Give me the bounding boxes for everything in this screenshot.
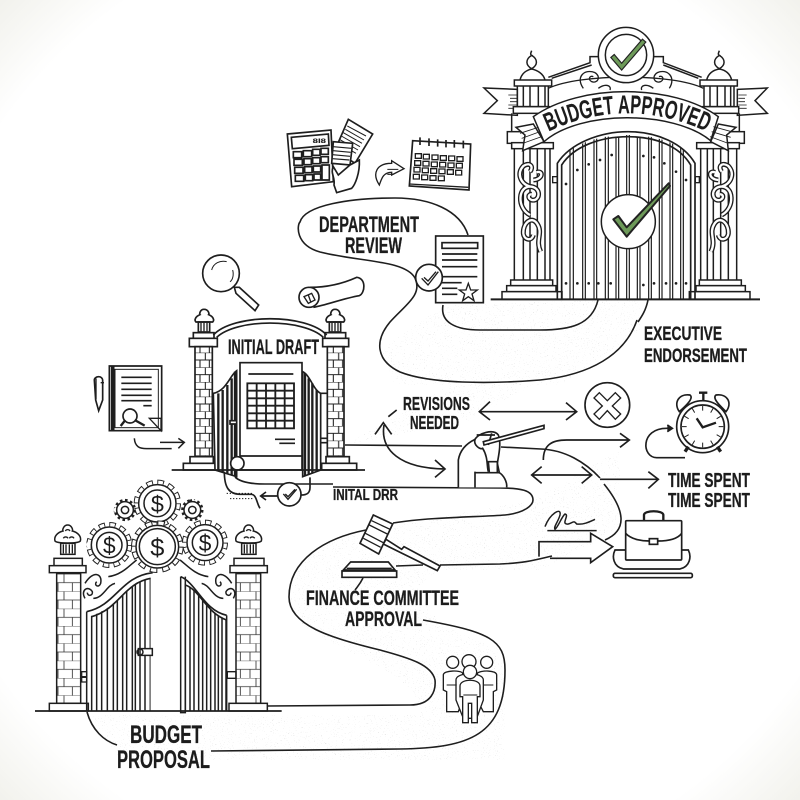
label: time spent: TIME SPENT [668,470,750,492]
door check badge [601,183,670,249]
right column [689,51,750,299]
icon: certified document [416,236,483,303]
gear cluster with dollar signs [91,484,224,569]
arrows around figure [375,402,658,488]
left pillar [49,525,88,711]
right pillar [322,309,357,470]
arrow: clock loop [646,425,685,458]
icon: rolled scroll [299,277,364,307]
gear left: $ [103,532,116,558]
label: time spent [668,470,750,512]
label: initial draft repeated: INITAL DRR [333,487,398,504]
small gear right [184,502,201,518]
gate: budget approved [482,26,770,300]
label: budget proposal: BUDGET [130,721,202,749]
arrow: draft to gate [134,438,184,449]
arched door [553,130,699,299]
label: budget proposal: PROPOSAL [117,746,210,774]
icon: calculator: 8I8 [313,138,326,145]
ornamental scrolls [83,560,235,598]
icon: committee people [443,655,497,723]
arch [213,319,327,337]
left leaf [82,570,153,711]
label: department review: REVIEW [345,233,402,258]
label: revisions needed [403,394,470,433]
label: budget proposal [117,721,210,774]
winding path [87,198,648,751]
gear right: $ [199,530,212,556]
arrow: signature hollow arrow [539,533,613,563]
icon: signature [545,511,597,531]
gate: initial draft [172,309,365,477]
icon: magnifier [203,255,259,311]
front ribbon with title: BUDGET APPROVED [542,95,711,132]
label: time spent: TIME SPENT [668,490,750,512]
right leaf [181,570,236,713]
label: revisions needed: REVISIONS [403,394,470,414]
crown check badge [598,27,654,83]
icon: papers and hand [332,119,373,193]
pediment [548,57,703,90]
heading: initial draft: INITIAL DRAFT [228,336,319,359]
label: revisions needed: NEEDED [410,413,459,433]
label: finance committee approval [306,587,459,631]
table [247,383,294,428]
figure with pointer [458,425,544,487]
icon: calculator [287,130,333,187]
left column [502,51,562,299]
icon: briefcase [613,511,692,578]
small gear left [117,502,133,518]
label: executive endorsement: EXECUTIVE [644,324,722,345]
icon: draft document with pen [94,366,162,431]
icon: arrow to calendar [376,161,404,185]
icon: calendar [409,137,471,190]
title document [240,363,302,470]
left pillar [183,309,217,470]
front ribbon with title [514,90,738,152]
label: executive endorsement [644,324,747,367]
icon: check return arrow [224,472,310,508]
left vine ornament [520,164,541,252]
icon: alarm clock [677,393,729,453]
right pillar [229,525,267,711]
label: executive endorsement: ENDORSEMENT [644,346,747,367]
right leaf [303,372,327,477]
icon: gavel [342,515,440,577]
back ribbon tails [484,88,767,115]
left leaf [213,371,244,477]
label: department review [319,212,419,258]
right vine ornament [710,164,732,252]
label: finance committee approval: FINANCE COMMITTEE [306,587,459,610]
label: finance committee approval: APPROVAL [345,608,422,631]
label: department review: DEPARTMENT [319,212,419,237]
icon: rejected cross [585,383,630,427]
gear top: $ [151,491,164,517]
gear centre: $ [150,534,164,562]
gate: budget proposal [35,484,282,713]
